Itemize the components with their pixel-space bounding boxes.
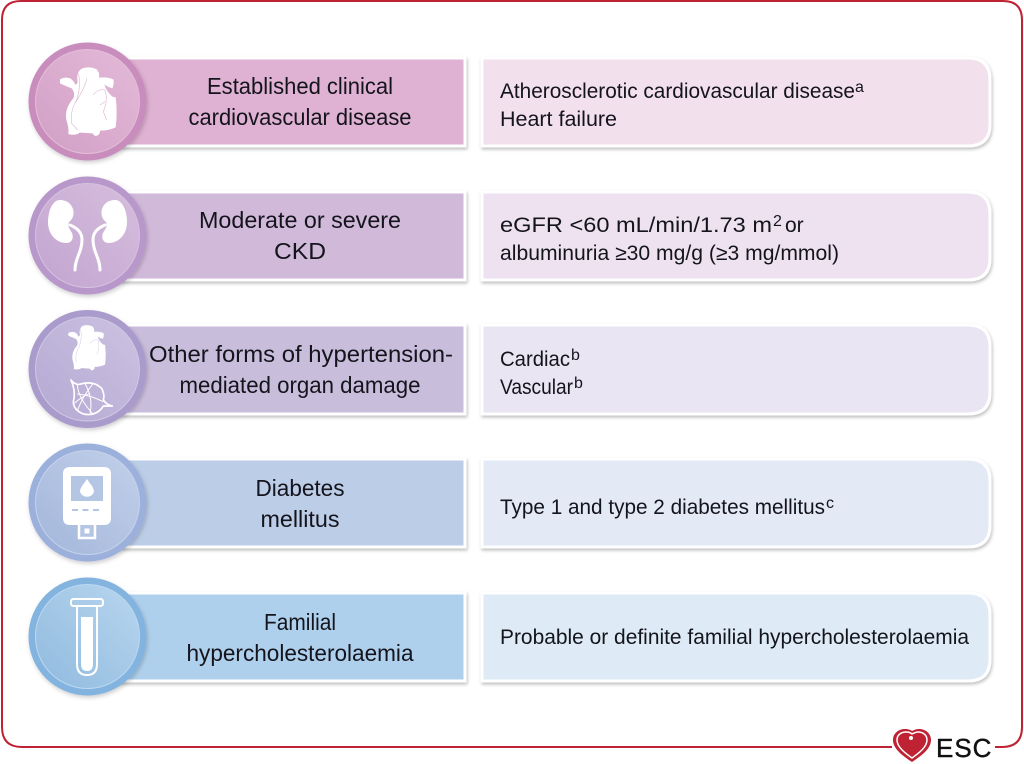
row 5: familial hypercholesterolaemia xyxy=(28,578,990,696)
row 1: established clinical cardiovascular disease xyxy=(28,42,990,160)
detail panel 2 xyxy=(482,192,990,280)
detail panel 3: Cardiac xyxy=(500,348,570,371)
detail panel 4 xyxy=(482,459,990,547)
detail panel 3: b xyxy=(571,347,580,364)
detail panel 1: Heart failure xyxy=(500,108,617,131)
icon: ESC heart xyxy=(893,729,931,762)
category bar 2: Moderate or severe xyxy=(199,207,401,233)
category bar 4: mellitus xyxy=(260,506,340,532)
row 4: diabetes mellitus xyxy=(28,444,990,562)
category bar 2: CKD xyxy=(274,238,326,264)
category bar 4: Diabetes xyxy=(256,475,344,501)
detail panel 2: eGFR <60 mL/min/1.73 m xyxy=(500,214,772,237)
detail panel 3: b xyxy=(574,375,583,392)
category bar 1: cardiovascular disease xyxy=(188,104,412,130)
ESC logo xyxy=(893,729,992,763)
detail panel 5: Probable or definite familial hypercholesterolaemia xyxy=(500,626,969,649)
category bar 4 xyxy=(110,459,465,547)
icon: kidneys xyxy=(28,176,146,294)
icon: glucose meter xyxy=(28,444,146,562)
category bar 3: mediated organ damage xyxy=(180,372,420,398)
detail panel 5 xyxy=(482,593,990,681)
category bar 2 xyxy=(110,192,465,280)
row 3: other forms of hypertension-mediated organ damage xyxy=(28,310,990,428)
category bar 3: Other forms of hypertension- xyxy=(149,341,453,367)
detail panel 1: a xyxy=(855,79,864,96)
detail panel 2: 2 xyxy=(773,213,782,230)
icon: test tube xyxy=(28,578,146,696)
category bar 3 xyxy=(110,325,465,414)
detail panel 2: albuminuria ≥30 mg/g (≥3 mg/mmol) xyxy=(500,242,839,265)
category bar 5: Familial xyxy=(264,609,336,635)
detail panel 1 xyxy=(482,58,990,146)
category bar 5: hypercholesterolaemia xyxy=(186,640,414,666)
detail panel 2: or xyxy=(785,214,804,237)
detail panel 3: Vascular xyxy=(500,376,573,399)
category bar 1: Established clinical xyxy=(207,73,393,99)
category bar 1 xyxy=(110,58,465,146)
detail panel 1: Atherosclerotic cardiovascular disease xyxy=(500,80,855,103)
category bar 5 xyxy=(110,593,465,681)
detail panel 3 xyxy=(482,325,990,414)
detail panel 4: c xyxy=(826,495,834,512)
icon: heart xyxy=(28,42,146,160)
row 2: moderate or severe CKD xyxy=(28,176,990,294)
icon: heart and retina xyxy=(28,310,146,428)
detail panel 4: Type 1 and type 2 diabetes mellitus xyxy=(500,496,825,519)
logo wordmark: ESC xyxy=(936,733,992,763)
